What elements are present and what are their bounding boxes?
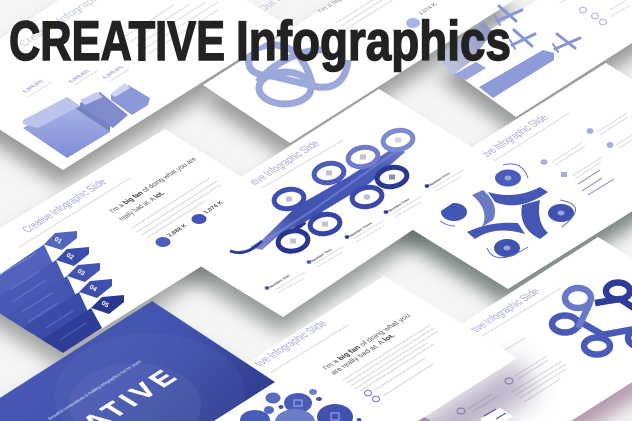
ring lower one — [276, 229, 310, 253]
arrow step 02 — [0, 247, 89, 320]
panel: knot slide (top middle) — [203, 0, 519, 143]
headline text: really bad at. A lot. — [116, 190, 167, 222]
arrow bar one — [453, 62, 486, 80]
subtitle line — [491, 113, 569, 163]
headline text: I'm a big fan of doing what you are — [107, 156, 199, 214]
icon: check circle two — [372, 396, 380, 402]
stat: second value: 1,074 K — [203, 200, 226, 215]
icons inside circles — [504, 176, 564, 250]
timeline spine — [250, 145, 405, 250]
panel: arrow steps slide (left) — [0, 129, 255, 353]
arrows: thin arcs around circles — [440, 164, 576, 258]
icon: stat circle — [406, 18, 420, 28]
text: blue labels — [484, 409, 506, 419]
subtitle line — [262, 140, 343, 188]
text: stat value: 1,074 K — [418, 3, 439, 16]
label card — [480, 408, 513, 421]
arrow step 05: 05 — [100, 300, 110, 310]
arrow step 05 — [42, 295, 124, 353]
text: body lines — [132, 178, 220, 238]
panel: knot slide (bottom right) — [418, 237, 632, 421]
icon: outlined square — [457, 408, 465, 414]
icons: small outlined circles — [580, 7, 606, 25]
text: item lines — [552, 113, 632, 179]
arrow step 04: 04 — [88, 284, 98, 294]
bullet group: item notes: Number Four — [387, 197, 411, 213]
title: slide title: ative Infographic Slide — [474, 112, 551, 162]
purple shadow from overlapping slide — [288, 358, 535, 421]
circle left — [441, 203, 467, 221]
panel: timeline slide (centre) — [150, 89, 505, 317]
bullet group: item notes — [265, 170, 463, 293]
arrow step 02: 02 — [65, 252, 75, 262]
ring lower two — [309, 212, 341, 236]
bullet group: item notes: Number Two — [310, 248, 334, 263]
text: body lines — [336, 0, 394, 29]
ring upper four — [382, 128, 414, 152]
icon: plane three — [553, 34, 580, 52]
ring connectors — [293, 158, 390, 231]
tail arc — [230, 241, 262, 253]
title: slide title: Creative Infographic Slide — [19, 177, 110, 235]
ring lower four — [376, 165, 408, 189]
panel: circle segments slide (middle right) — [376, 63, 632, 289]
title: slide title: tive Infographic Slide — [251, 318, 330, 369]
arrow step 03 — [4, 263, 100, 332]
segment: bottom arc — [467, 223, 525, 239]
subtitle line — [479, 288, 561, 338]
text: body lines — [560, 0, 630, 17]
title: Infographics — [236, 9, 511, 72]
segment: right arc — [521, 200, 548, 239]
icon: plane two — [510, 30, 535, 49]
panel: block chart slide (top left) — [0, 0, 290, 170]
bullet group: item notes: Number Three — [348, 222, 374, 238]
circle right — [548, 204, 574, 222]
stat: second value — [192, 200, 226, 224]
text: item lines — [468, 338, 566, 412]
bullet group: item notes: Number One — [268, 274, 291, 289]
column shape — [436, 22, 493, 75]
text: bold labels — [578, 170, 614, 195]
text: check lines — [375, 358, 433, 396]
ring upper one — [273, 187, 305, 211]
arrow step 01 — [0, 231, 77, 296]
title — [9, 9, 511, 72]
timeline diagram — [230, 128, 414, 253]
subtitle line — [270, 325, 348, 373]
icons: item bullets — [540, 128, 614, 177]
circle top — [495, 170, 521, 186]
text: value two: 5,300,631 — [68, 69, 92, 84]
3D block chart — [23, 83, 150, 158]
icon: plane one — [495, 6, 522, 25]
title: slide title: ative Infographic Slide — [464, 286, 543, 337]
arrow step 04 — [23, 279, 112, 344]
bullet group: item notes: Number Five — [428, 172, 451, 187]
panel: cover slide (bottom left) — [0, 301, 275, 421]
text: body lines — [124, 2, 218, 54]
segment: top arc — [488, 187, 548, 205]
stat: first value — [156, 223, 190, 247]
title: CREATIVE — [9, 9, 225, 72]
panel: text and bubbles slide (bottom middle) — [155, 276, 517, 421]
text: band lines — [0, 253, 86, 340]
arrow stack — [0, 231, 124, 353]
spine highlight — [268, 150, 398, 239]
cover decorative circles — [69, 363, 244, 421]
arrow bar two — [479, 50, 554, 98]
ring upper two — [313, 161, 345, 185]
circle bottom — [494, 239, 520, 257]
text: value captions — [28, 69, 129, 97]
icon: check circle one — [364, 390, 372, 396]
text: body lines — [343, 325, 438, 391]
stat: first value: 2,888 K — [167, 223, 190, 238]
ring lower three — [351, 185, 383, 209]
title: slide title: ative Infographic Slide — [244, 138, 323, 189]
arrow step 01: 01 — [53, 236, 63, 246]
ring upper three — [347, 145, 379, 169]
icon: outlined circle — [505, 378, 513, 384]
headline text: I'm a big fan of doing what you — [320, 312, 413, 371]
segment: left arc — [472, 190, 495, 227]
panel: planes slide (top right) — [436, 0, 632, 117]
cover subtitle: Beautiful compositions & making infographics fun for years — [47, 359, 143, 421]
subtitle line — [18, 178, 130, 248]
text: value three: 5,300,631 — [102, 65, 126, 80]
arrow step 03: 03 — [76, 268, 86, 278]
headline text: are really bad at. A lot. — [328, 332, 397, 376]
knot diagram — [249, 45, 348, 104]
knot diagram — [552, 282, 632, 354]
bubble cluster — [240, 389, 362, 421]
text: value one: 5,300,631 — [22, 79, 46, 94]
